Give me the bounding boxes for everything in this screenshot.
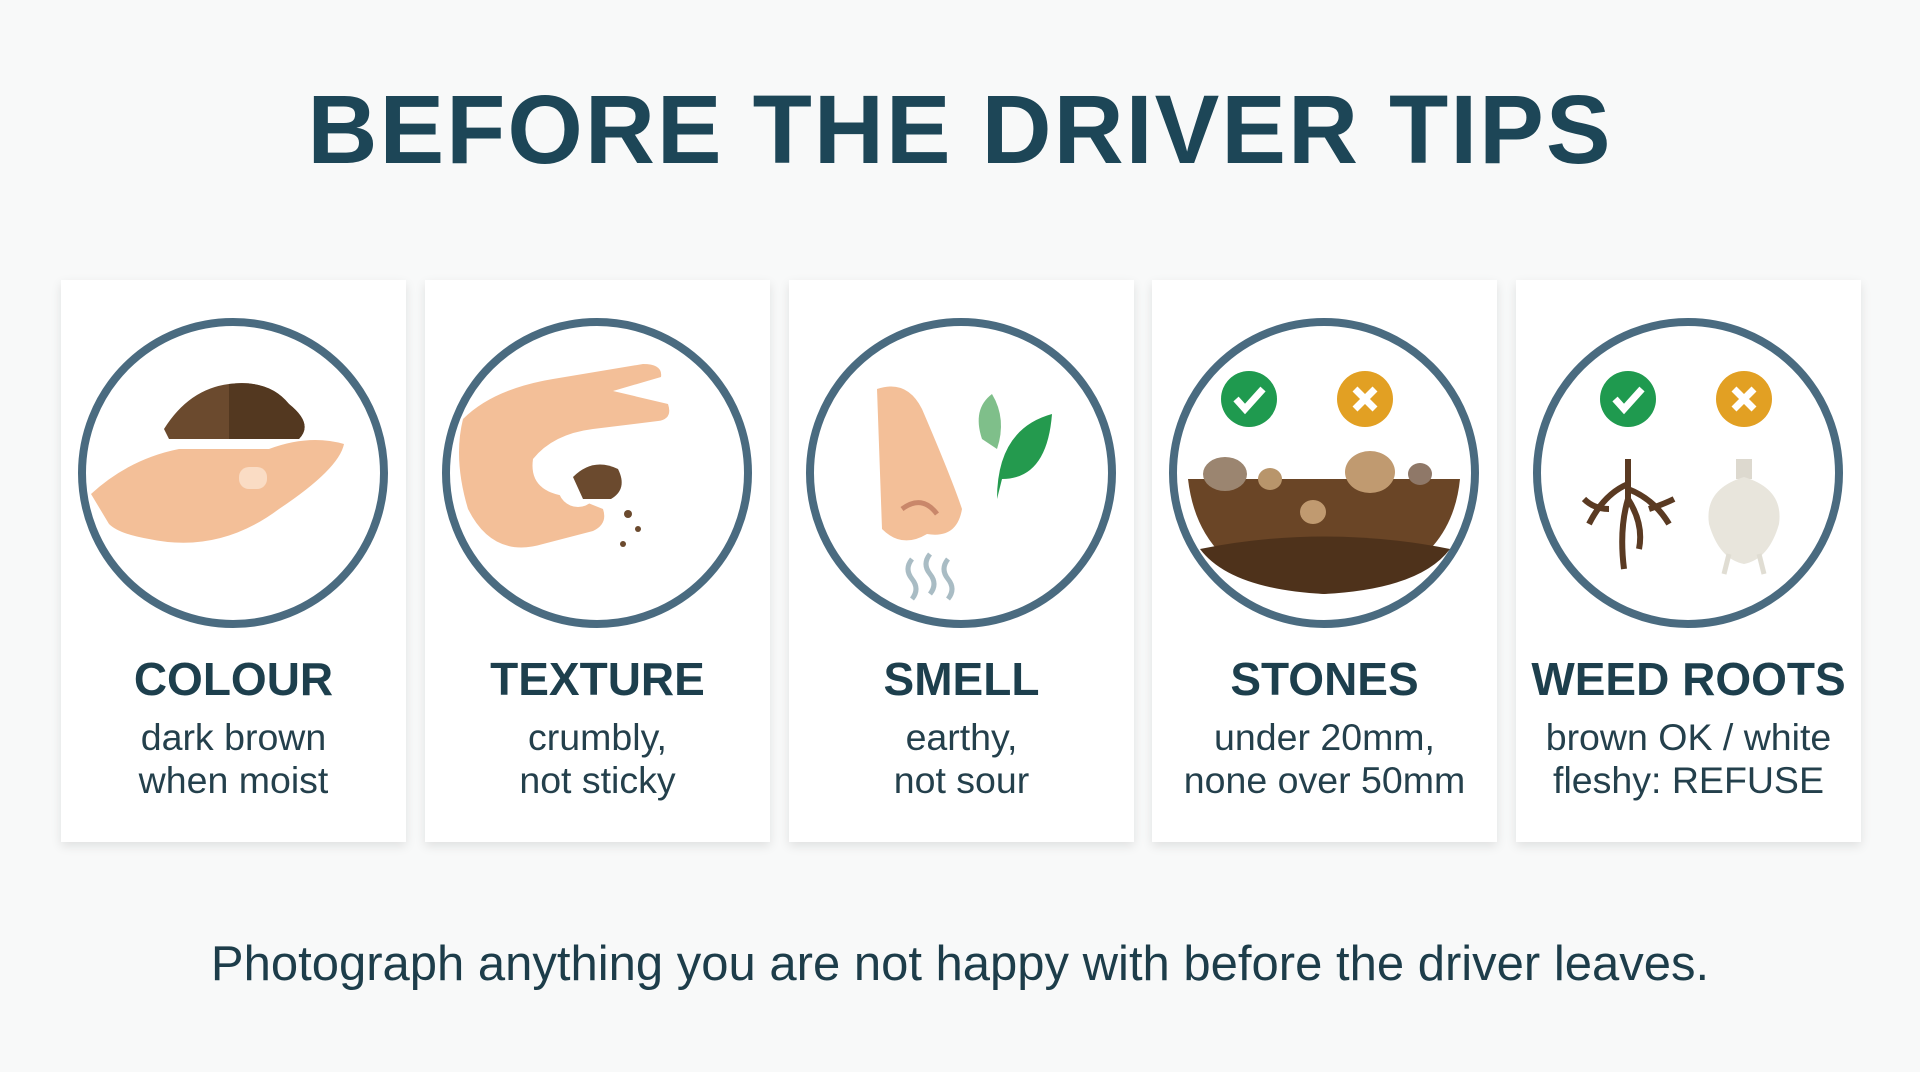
text: smell — [894, 716, 1029, 801]
heading: weed roots: WEED ROOTS — [1531, 653, 1846, 705]
text: colour: dark brown — [141, 716, 326, 758]
icon: brown and white roots — [1533, 318, 1843, 628]
panel: colour — [61, 280, 406, 842]
heading: stones: STONES — [1230, 653, 1419, 705]
text: weed roots: brown OK / white — [1546, 716, 1831, 758]
text: texture — [519, 716, 676, 801]
panel: stones — [1152, 280, 1497, 842]
text: colour: when moist — [139, 759, 328, 801]
text: smell: not sour — [894, 759, 1029, 801]
panel: weed roots — [1516, 280, 1861, 842]
icon: hand with soil — [78, 318, 388, 628]
text: weed roots: fleshy: REFUSE — [1553, 759, 1824, 801]
footer note: Photograph anything you are not happy with before the driver leaves. — [211, 937, 1709, 991]
heading: colour: COLOUR — [134, 653, 333, 705]
panel: smell — [789, 280, 1134, 842]
icon: pinching hand — [442, 318, 752, 628]
text: stones: under 20mm, — [1214, 716, 1435, 758]
panel: texture — [425, 280, 770, 842]
text: smell: earthy, — [906, 716, 1017, 758]
text: texture: not sticky — [519, 759, 676, 801]
title: BEFORE THE DRIVER TIPS — [307, 75, 1613, 184]
icon: nose and leaf — [806, 318, 1116, 628]
text: colour — [138, 716, 328, 801]
text: stones — [1184, 716, 1465, 801]
heading: smell: SMELL — [884, 653, 1039, 705]
heading: texture: TEXTURE — [490, 653, 705, 705]
icon: soil with stones — [1169, 318, 1479, 628]
text: stones: none over 50mm — [1184, 759, 1465, 801]
text: weed roots — [1546, 716, 1831, 801]
text: texture: crumbly, — [528, 716, 667, 758]
